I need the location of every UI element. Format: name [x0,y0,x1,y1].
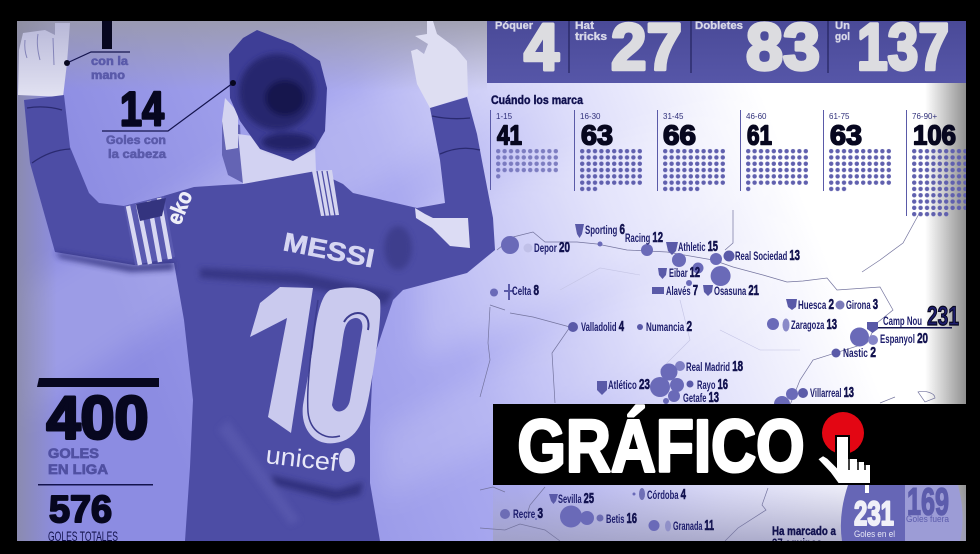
Rayo: Rayo 16 [697,376,728,393]
Depor: Depor 20 [534,239,570,256]
Girona: Girona 3 [846,296,878,313]
home goals [854,495,895,539]
stat: 400 league goals: EN LIGA [48,461,108,477]
stat: 576 total goals [48,489,118,544]
doubles: Dobletes [695,20,743,32]
icon: red button [822,412,864,454]
Osasuna [703,266,759,299]
minute 76-90+ [906,110,966,217]
stat: 400 league goals: 400 [46,384,148,452]
player Messi [18,21,495,541]
ear [222,98,238,150]
single goal: 137 [857,10,949,84]
Numancia [637,318,692,335]
Numancia: Numancia 2 [646,318,692,335]
home goals: 231 [854,495,894,533]
Girona [836,296,878,313]
Racing: Racing 12 [625,229,663,246]
Granada: Granada 11 [673,517,714,534]
minute 46-60 [740,110,809,192]
Valencia bubble [774,396,790,412]
minute 16-30: 63 [581,120,613,150]
Eibar [658,262,704,281]
minute 46-60: 46-60 [746,112,767,121]
left hand [18,23,70,97]
stat: goals with the hand [64,21,130,82]
stat: headed goals: la cabeza [108,147,166,161]
Racing [625,229,663,256]
single goal: Un [835,20,850,32]
poker [495,10,559,84]
minute 1-15 [490,110,559,190]
right hand [411,21,468,108]
stat: 400 league goals [37,378,159,486]
Alaves: Alavés 7 [666,282,698,299]
doubles [695,10,820,84]
Valladolid [568,318,624,335]
teams scored against note [772,526,837,550]
collar stripes [312,170,339,216]
minute 1-15: 41 [497,120,522,150]
Granada [648,517,714,534]
panel: goal types band [487,10,966,84]
teams scored against note: 37 equipos [772,538,822,550]
minute 1-15: 1-15 [496,112,513,121]
Sevilla: Sevilla 25 [558,490,594,507]
Celta [490,282,539,300]
Real Madrid [660,358,743,380]
minute 46-60: 61 [747,120,772,150]
sleeve patch [415,208,470,248]
map of Spain [480,210,935,541]
minute 31-45: 31-45 [663,112,684,121]
banner: GRAFICO [493,404,980,493]
unicef: unicef [264,441,339,477]
Recre [500,505,543,522]
hat tricks: tricks [575,31,607,43]
Camp Nou: 231 [927,301,959,331]
stat: headed goals: Goles con [106,133,166,147]
Sporting [575,221,625,246]
stat: 400 league goals: GOLES [48,445,99,461]
minute 16-30: 16-30 [580,112,601,121]
sleeve armband [124,196,175,265]
home and away goals circles [841,482,963,541]
poker: 4 [524,10,559,84]
Villarreal: Villarreal 13 [810,384,854,401]
away goals [906,482,949,524]
minute 61-75: 61-75 [829,112,850,121]
beard [222,120,243,183]
icon: pointing hand [817,436,871,493]
number 10 [250,287,380,443]
heading: Cuándo los marca [491,95,584,107]
doubles: 83 [746,10,820,84]
Depor [501,236,570,256]
Athletic [666,238,718,267]
single goal: gol [835,31,850,43]
minute 76-90+: 106 [913,120,956,150]
Nastic [832,344,876,361]
Valladolid: Valladolid 4 [581,318,624,335]
stat: goals with the hand: con la [91,56,129,68]
Villarreal [786,384,854,401]
minute 76-90+: 76-90+ [912,112,937,121]
single goal [835,10,949,84]
Athletic: Athletic 15 [678,238,718,255]
Huesca: Huesca 2 [798,296,834,313]
sponsor on sleeve: eko [161,187,197,228]
Cordoba [632,486,686,503]
Osasuna: Osasuna 21 [714,282,759,299]
hair [229,30,327,161]
Camp Nou [850,301,959,346]
Getafe [663,389,719,406]
minute 61-75 [823,110,892,192]
teams scored against note: Ha marcado a [772,526,837,538]
Atletico: Atlético 23 [608,376,650,393]
hat tricks: Hat [575,20,594,32]
Sevilla [549,490,594,528]
stat: 576 total goals: 576 [49,489,112,531]
Espanyol: Espanyol 20 [880,330,928,347]
Betis: Betis 16 [606,510,637,527]
stat: 576 total goals: GOLES TOTALES [48,528,118,544]
Huesca [786,296,834,313]
Sporting: Sporting 6 [585,221,625,238]
away goals: Goles fuera [906,514,949,524]
jersey [24,95,495,541]
Real Sociedad [710,247,800,265]
hat tricks [575,10,682,84]
hat tricks: 27 [611,10,682,84]
Cordoba: Córdoba 4 [647,486,686,503]
Recre: Recre 3 [513,505,543,522]
Real Sociedad: Real Sociedad 13 [735,247,800,264]
Atletico [597,376,670,397]
Rayo [670,376,728,393]
sleeve creases [27,107,480,163]
poker: Póquer [495,20,534,32]
Getafe: Getafe 13 [683,389,719,406]
minute 61-75: 63 [830,120,862,150]
neck [238,134,316,184]
stat: headed goals [102,80,236,161]
Real Madrid: Real Madrid 18 [686,358,743,375]
stat: goals with the hand: mano [91,70,125,82]
jersey folds [55,226,412,525]
Alaves [652,280,698,299]
Zaragoza [767,316,837,333]
Betis [580,510,637,527]
minute 31-45 [657,110,726,192]
home goals: Goles en el [854,529,895,539]
away goals: 169 [907,482,949,524]
stat: headed goals: 14 [120,84,164,136]
panel: goals by stadium map [490,221,959,534]
Celta: Celta 8 [512,282,539,299]
name on jersey: MESSI [281,226,377,273]
Zaragoza: Zaragoza 13 [791,316,837,333]
panel: when he scores [490,95,966,217]
Eibar: Eibar 12 [669,264,700,281]
minute 16-30 [574,110,643,192]
Camp Nou: Camp Nou [883,314,922,328]
Nastic: Nastic 2 [843,344,876,361]
banner title: GRÁFICO [518,404,804,488]
unicef badge [339,448,355,472]
minute 31-45: 66 [663,120,696,150]
hair shadow [239,54,315,151]
